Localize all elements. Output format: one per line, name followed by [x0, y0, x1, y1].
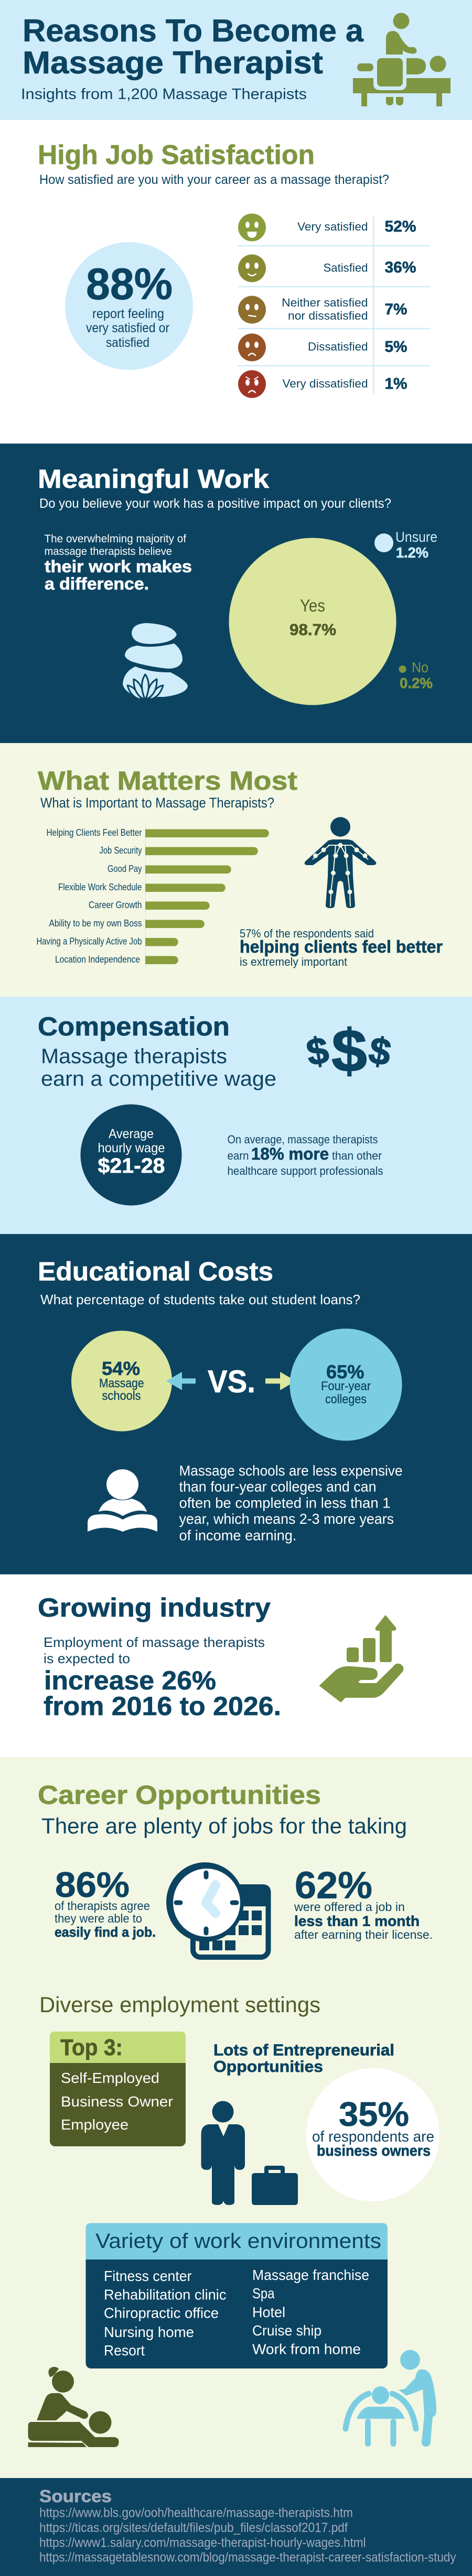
bubble: yes: [229, 538, 396, 705]
panel: compensation: [0, 997, 472, 1234]
card: top 3: Business Owner: [61, 2093, 173, 2110]
row: satisfied: Satisfied: [323, 261, 368, 275]
callout: 35 percent: business owners: [317, 2143, 431, 2159]
icon: stacked stones with lotus: [123, 623, 188, 700]
list: right column: Hotel: [252, 2304, 285, 2320]
row: dissatisfied: [308, 339, 407, 355]
stat: 86 percent: 86%: [55, 1865, 130, 1905]
source list: [39, 2506, 456, 2564]
list: right column: Work from home: [252, 2341, 361, 2357]
stat: 86 percent: [55, 1865, 156, 1940]
panel: sources: [0, 2478, 472, 2576]
callout: hourly wage: [81, 1105, 181, 1205]
icon: very satisfied face: [238, 214, 266, 241]
icon: dollar signs: $: [366, 1029, 394, 1074]
arrow: left: [166, 1372, 196, 1390]
panel: meaningful work: [0, 443, 472, 743]
callout: hourly wage: $21-28: [98, 1154, 165, 1177]
row: satisfied: 36%: [385, 259, 416, 276]
row: very dissatisfied: Very dissatisfied: [282, 377, 368, 390]
arrow: right: [265, 1372, 296, 1390]
row: satisfied: [323, 259, 416, 276]
callout: helping clients: [240, 927, 443, 968]
bubble: unsure: 1.2%: [396, 544, 428, 561]
icon: hand holding growth chart: [319, 1615, 403, 1702]
circle: four-year colleges: [289, 1329, 402, 1441]
heading: entrepreneurial: Lots of Entrepreneurial: [213, 2040, 394, 2059]
text block: their work makes: [45, 557, 192, 576]
callout: 88 percent: 88%: [86, 259, 173, 309]
subtitle: Insights from 1,200 Massage Therapists: [21, 86, 307, 103]
icon: very dissatisfied face: [238, 370, 266, 398]
satisfaction table: [238, 214, 431, 398]
circle: massage schools: Massage: [99, 1376, 144, 1391]
bar chart: Location Independence: [55, 954, 140, 965]
heading: entrepreneurial: Opportunities: [213, 2057, 323, 2076]
circle: massage schools: 54%: [102, 1358, 140, 1379]
row: very satisfied: [297, 218, 416, 235]
text block: than four-year colleges and can: [179, 1479, 377, 1494]
panel: high job satisfaction: [38, 140, 431, 398]
text block: Employment of massage therapists: [44, 1634, 265, 1650]
heading: Meaningful Work: [38, 464, 269, 494]
row: very satisfied: Very satisfied: [297, 220, 368, 233]
text block: The overwhelming majority of: [44, 533, 186, 545]
row: neither: Neither satisfied: [282, 296, 368, 309]
heading: What Matters Most: [38, 766, 297, 795]
text block: than other: [332, 1149, 382, 1162]
callout: 88 percent: report feeling: [92, 307, 164, 321]
stat: 62 percent: after earning their license.: [294, 1928, 433, 1941]
title: Massage Therapist: [23, 45, 323, 80]
bubble: no: No: [412, 659, 428, 675]
stat: 62 percent: were offered a job in: [294, 1900, 405, 1914]
card: top 3: Top 3:: [60, 2035, 123, 2060]
icon: clock and calendar: [166, 1862, 271, 1957]
heading: entrepreneurial: [213, 2040, 394, 2076]
list: left column: Resort: [104, 2342, 145, 2359]
text block: 18% more: [251, 1144, 329, 1163]
callout: 35 percent: 35%: [339, 2095, 409, 2133]
text block: often be completed in less than 1: [179, 1494, 390, 1511]
text block: is expected to: [44, 1651, 130, 1666]
question: What is Important to Massage Therapists?: [40, 795, 274, 811]
question: Do you believe your work has a positive impact on your clients?: [39, 496, 391, 511]
icon: satisfied face: [238, 255, 266, 282]
text block: earn: [228, 1149, 249, 1162]
title: [23, 13, 364, 80]
row: very dissatisfied: 1%: [385, 375, 407, 392]
circle: massage schools: schools: [102, 1389, 141, 1403]
circle: four-year colleges: colleges: [325, 1392, 367, 1406]
callout: 88 percent: very satisfied or: [86, 321, 169, 335]
source list: https://www1.salary.com/massage-therapist-hourly-wages.html: [39, 2535, 366, 2550]
title: Reasons To Become a: [23, 13, 364, 48]
bubble: yes: Yes: [300, 596, 325, 615]
icon: student reading: [88, 1469, 157, 1532]
subheading: employment settings: Diverse employment settings: [39, 1992, 320, 2017]
text block: On average, massage therapists: [228, 1133, 378, 1146]
subheading: earn a competitive wage: [41, 1067, 276, 1090]
heading: High Job Satisfaction: [38, 140, 315, 170]
card: top 3: [50, 2032, 186, 2146]
callout: helping clients: 57% of the respondents said: [240, 927, 374, 940]
icon: suitcase: [252, 2166, 298, 2205]
card: work environments: Variety of work environments: [95, 2230, 381, 2253]
callout: hourly wage: hourly wage: [98, 1141, 165, 1155]
bar chart: Good Pay: [108, 864, 142, 874]
list: right column: [252, 2267, 369, 2357]
icon: dollar signs: [304, 1018, 394, 1085]
heading: Growing industry: [38, 1593, 271, 1622]
row: neither: [282, 296, 407, 322]
icon: dissatisfied face: [238, 333, 266, 362]
panel: growing industry: [0, 1574, 472, 1757]
text block: from 2016 to 2026.: [44, 1691, 281, 1721]
bubble: no: 0.2%: [400, 675, 433, 691]
icon: dollar signs: $: [331, 1018, 367, 1085]
card: top 3: Self-Employed: [61, 2070, 159, 2086]
subheading: [41, 1045, 276, 1090]
circle: four-year colleges: 65%: [326, 1361, 364, 1382]
list: right column: Cruise ship: [252, 2322, 321, 2339]
list: left column: Fitness center: [104, 2268, 192, 2284]
comparison label: VS.: [208, 1364, 255, 1399]
text block: [228, 1133, 383, 1177]
stat: 86 percent: easily find a job.: [55, 1924, 156, 1940]
circle: massage schools: [71, 1331, 172, 1432]
bar chart: Having a Physically Active Job: [37, 936, 142, 946]
text block: [44, 533, 192, 593]
text block: of income earning.: [179, 1527, 297, 1544]
bubble: unsure: [374, 529, 437, 561]
stat: 62 percent: [294, 1864, 433, 1941]
callout: hourly wage: Average: [109, 1127, 154, 1141]
row: neither: 7%: [385, 301, 407, 318]
text block: increase 26%: [44, 1666, 216, 1695]
bar chart: Flexible Work Schedule: [58, 882, 142, 892]
icon: massage on table: [28, 2367, 119, 2447]
icon: dollar signs: $: [304, 1029, 332, 1074]
stat: 86 percent: of therapists agree: [55, 1899, 150, 1913]
callout: 88 percent: [65, 242, 193, 370]
heading: Compensation: [38, 1012, 230, 1041]
text block: massage therapists believe: [44, 545, 172, 558]
bar chart: Helping Clients Feel Better: [46, 827, 142, 838]
text block: a difference.: [45, 574, 149, 593]
callout: 35 percent: [306, 2068, 439, 2201]
row: very satisfied: 52%: [385, 218, 416, 235]
card: work environments: [86, 2223, 388, 2368]
callout: 35 percent: of respondents are: [312, 2129, 434, 2145]
bubble: yes: 98.7%: [289, 620, 336, 639]
source list: https://ticas.org/sites/default/files/pub_files/classof2017.pdf: [39, 2520, 348, 2535]
card: top 3: Employee: [61, 2116, 128, 2133]
list: right column: Massage franchise: [252, 2267, 369, 2283]
chart: bubble chart of answers: [229, 529, 437, 705]
source list: https://www.bls.gov/ooh/healthcare/massage-therapists.htm: [39, 2506, 353, 2520]
list: left column: Nursing home: [104, 2324, 194, 2340]
text block: Massage schools are less expensive: [179, 1462, 403, 1479]
text block: healthcare support professionals: [228, 1164, 383, 1177]
panel: educational costs: [0, 1234, 472, 1574]
callout: helping clients: is extremely important: [240, 955, 347, 968]
icon: massage therapist and table: [353, 13, 450, 106]
icon: neutral face: [238, 296, 266, 324]
callout: helping clients: helping clients feel better: [240, 937, 443, 956]
stat: 86 percent: they were able to: [55, 1912, 142, 1925]
text block: [179, 1462, 403, 1544]
icon: businessman: [201, 2101, 245, 2205]
list: left column: Chiropractic office: [104, 2305, 219, 2321]
question: How satisfied are you with your career as a massage therapist?: [39, 172, 389, 187]
panel: what matters most: [0, 743, 472, 997]
icon: seated massage: [346, 2350, 436, 2447]
stat: 62 percent: 62%: [295, 1864, 372, 1906]
row: neither: nor dissatisfied: [288, 309, 368, 322]
bar chart: Ability to be my own Boss: [49, 918, 142, 929]
circle: four-year colleges: Four-year: [321, 1379, 371, 1393]
heading: Educational Costs: [38, 1257, 273, 1286]
bar chart: [37, 824, 269, 969]
callout: 88 percent: satisfied: [106, 335, 149, 350]
heading: Sources: [39, 2486, 112, 2506]
bubble: no: [399, 659, 433, 691]
panel: header: [0, 0, 472, 120]
panel: career opportunities: [0, 1757, 472, 2478]
bar chart: Job Security: [100, 845, 142, 856]
bubble: unsure: Unsure: [395, 529, 437, 545]
row: dissatisfied: 5%: [385, 339, 407, 355]
stat: 62 percent: less than 1 month: [294, 1913, 420, 1929]
list: left column: Rehabilitation clinic: [104, 2287, 227, 2302]
list: right column: Spa: [252, 2285, 275, 2301]
subheading: Massage therapists: [41, 1045, 227, 1068]
row: dissatisfied: Dissatisfied: [308, 340, 368, 353]
subheading: There are plenty of jobs for the taking: [41, 1814, 407, 1838]
text block: year, which means 2-3 more years: [179, 1511, 394, 1527]
bar chart: Career Growth: [89, 900, 142, 910]
question: What percentage of students take out student loans?: [40, 1292, 360, 1307]
list: left column: [104, 2268, 227, 2359]
text block: [44, 1634, 281, 1721]
icon: body with joints: [305, 817, 376, 908]
heading: Career Opportunities: [38, 1781, 321, 1810]
row: very dissatisfied: [282, 375, 407, 392]
